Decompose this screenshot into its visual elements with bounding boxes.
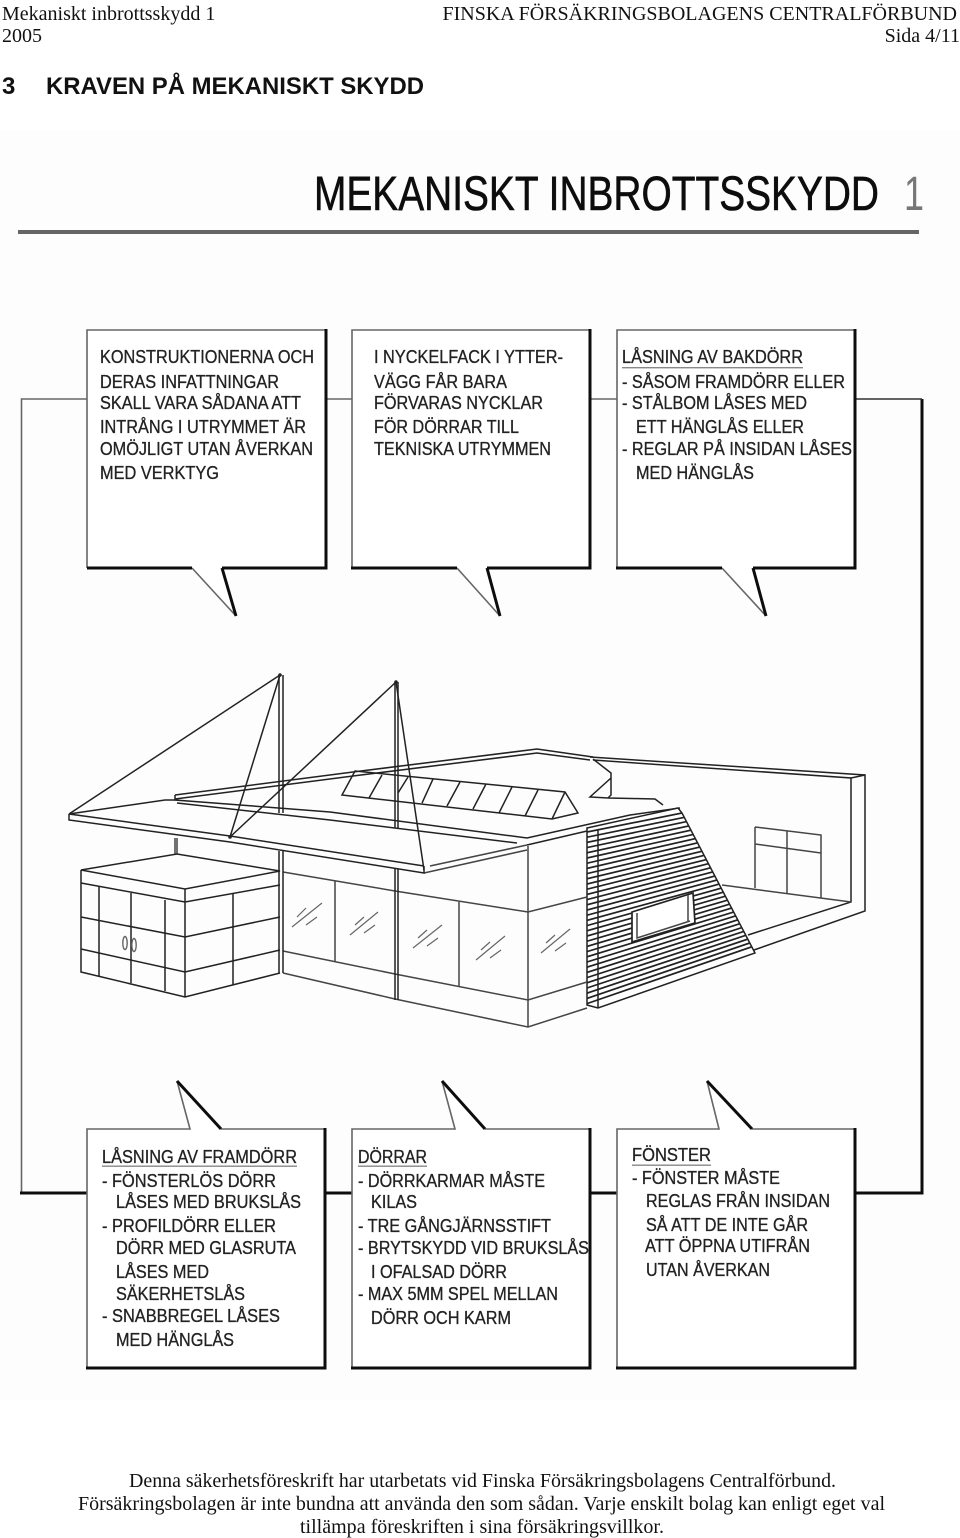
page header <box>2 2 960 47</box>
callout: dörrar: - DÖRRKARMAR MÅSTE <box>358 1171 545 1191</box>
pillars and guy wires <box>69 673 424 1000</box>
connector frame <box>20 399 922 1193</box>
entrance block with doors <box>81 854 280 997</box>
building illustration <box>69 673 865 1027</box>
callout: konstruktioner: OMÖJLIGT UTAN ÅVERKAN <box>100 439 313 459</box>
callout: låsning av bakdörr: ETT HÄNGLÅS ELLER <box>636 417 804 437</box>
callout: fönster: UTAN ÅVERKAN <box>646 1260 770 1280</box>
drawing title <box>18 168 924 234</box>
callout: fönster: FÖNSTER <box>632 1145 711 1165</box>
page header: FINSKA FÖRSÄKRINGSBOLAGENS CENTRALFÖRBUND <box>442 2 957 25</box>
brick wall <box>587 798 757 1008</box>
callout: konstruktioner: KONSTRUKTIONERNA OCH <box>100 347 314 367</box>
callout: dörrar: DÖRRAR <box>358 1147 427 1167</box>
callout: låsning av framdörr <box>86 1081 326 1368</box>
callout: låsning av bakdörr: - REGLAR PÅ INSIDAN LÅSES <box>622 439 852 459</box>
callout: nyckelfack: VÄGG FÅR BARA <box>374 372 507 392</box>
callout: låsning av framdörr: DÖRR MED GLASRUTA <box>116 1238 296 1258</box>
storefront <box>283 845 587 1027</box>
callout: låsning av bakdörr: LÅSNING AV BAKDÖRR <box>622 347 803 367</box>
callout: dörrar: DÖRR OCH KARM <box>371 1308 511 1328</box>
footer disclaimer <box>78 1470 885 1538</box>
callout: nyckelfack: TEKNISKA UTRYMMEN <box>374 439 551 459</box>
callout: låsning av framdörr: SÄKERHETSLÅS <box>116 1284 245 1304</box>
callout: låsning av framdörr: LÅSES MED <box>116 1262 209 1282</box>
skylight <box>342 771 578 819</box>
callout: låsning av framdörr: MED HÄNGLÅS <box>116 1330 234 1350</box>
callout: låsning av framdörr: - FÖNSTERLÖS DÖRR <box>102 1171 276 1191</box>
callout: låsning av framdörr: - SNABBREGEL LÅSES <box>102 1306 280 1326</box>
roof <box>175 749 680 845</box>
callout: fönster: SÅ ATT DE INTE GÅR <box>646 1215 808 1235</box>
canopy <box>69 800 424 873</box>
callout: dörrar: KILAS <box>371 1192 417 1212</box>
callout: konstruktioner <box>87 329 326 616</box>
callout: fönster <box>616 1081 855 1368</box>
callout: låsning av framdörr: LÅSNING AV FRAMDÖRR <box>102 1147 297 1167</box>
footer disclaimer: Denna säkerhetsföreskrift har utarbetats vid Finska Försäkringsbolagens Centralförbund. <box>129 1470 836 1492</box>
callout: låsning av framdörr: LÅSES MED BRUKSLÅS <box>116 1192 301 1212</box>
callout: konstruktioner: DERAS INFATTNINGAR <box>100 372 279 392</box>
callout: dörrar: I OFALSAD DÖRR <box>371 1262 507 1282</box>
footer disclaimer: Försäkringsbolagen är inte bundna att använda den som sådan. Varje enskilt bolag kan enligt eget val <box>78 1493 885 1515</box>
drawing title: 1 <box>904 168 924 221</box>
callout: nyckelfack: I NYCKELFACK I YTTER- <box>374 347 563 367</box>
callout: låsning av framdörr: - PROFILDÖRR ELLER <box>102 1216 276 1236</box>
callout: dörrar: - TRE GÅNGJÄRNSSTIFT <box>358 1216 551 1236</box>
callout: nyckelfack <box>351 329 590 616</box>
callout: konstruktioner: INTRÅNG I UTRYMMET ÄR <box>100 417 306 437</box>
callout: nyckelfack: FÖR DÖRRAR TILL <box>374 417 519 437</box>
callout: konstruktioner: SKALL VARA SÅDANA ATT <box>100 393 301 413</box>
callout: nyckelfack: FÖRVARAS NYCKLAR <box>374 393 543 413</box>
page header: Sida 4/11 <box>885 25 960 47</box>
page header: Mekaniskt inbrottsskydd 1 <box>2 3 215 25</box>
callout: låsning av bakdörr: MED HÄNGLÅS <box>636 463 754 483</box>
back room wall and window <box>590 757 865 950</box>
callout: låsning av bakdörr: - STÅLBOM LÅSES MED <box>622 393 807 413</box>
page header: 2005 <box>2 25 42 47</box>
callout: konstruktioner: MED VERKTYG <box>100 463 219 483</box>
callout: dörrar <box>351 1081 590 1368</box>
callout: låsning av bakdörr: - SÅSOM FRAMDÖRR ELLER <box>622 372 845 392</box>
footer disclaimer: tillämpa föreskriften i sina försäkringsvillkor. <box>300 1516 664 1538</box>
callout: dörrar: - MAX 5MM SPEL MELLAN <box>358 1284 558 1304</box>
section heading: KRAVEN PÅ MEKANISKT SKYDD <box>46 72 424 100</box>
callout: fönster: ATT ÖPPNA UTIFRÅN <box>645 1236 810 1256</box>
section heading: 3 <box>2 73 15 100</box>
callout: fönster: REGLAS FRÅN INSIDAN <box>646 1191 830 1211</box>
callout: dörrar: - BRYTSKYDD VID BRUKSLÅS <box>358 1238 589 1258</box>
callout: låsning av bakdörr <box>616 329 855 616</box>
callout: fönster: - FÖNSTER MÅSTE <box>632 1168 780 1188</box>
door handles <box>123 936 136 952</box>
